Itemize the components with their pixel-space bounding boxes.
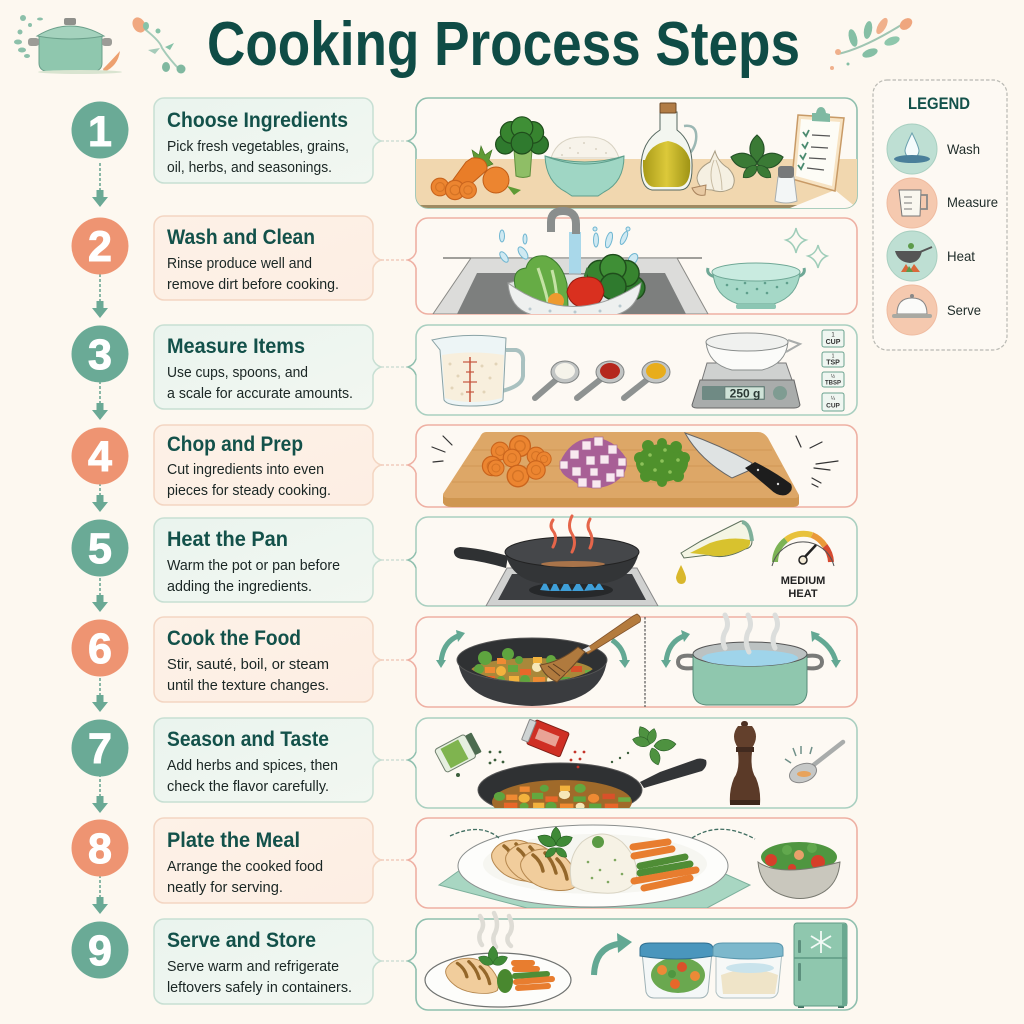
step number 4: 4 <box>88 433 112 481</box>
icon: pepper mill <box>730 721 760 805</box>
legend item: measure: Measure <box>947 194 998 210</box>
card: Season and Taste: Add herbs and spices, then <box>167 758 338 774</box>
step number 3 <box>72 326 128 382</box>
icon: falling spices <box>456 751 629 777</box>
card: Plate the Meal: Arrange the cooked food <box>167 859 323 875</box>
icon: recipe checklist clipboard <box>792 107 844 191</box>
card: Cook the Food: Stir, sauté, boil, or steam <box>167 657 329 673</box>
title: Cooking Process Steps <box>207 10 800 79</box>
icon: carrots and green beans <box>633 842 696 888</box>
card: Chop and Prep: pieces for steady cooking. <box>167 483 331 499</box>
card: Cook the Food: Cook the Food <box>167 627 301 650</box>
icon: measurement tags: TSP <box>826 360 840 366</box>
card: Cook the Food: until the texture changes. <box>167 678 329 694</box>
card: Plate the Meal: neatly for serving. <box>167 880 283 896</box>
step number 8 <box>72 820 128 876</box>
motion lines <box>432 436 838 487</box>
icon: water splashes <box>498 227 640 266</box>
icon: stir arrows left <box>441 636 625 662</box>
step number 7: 7 <box>88 725 112 773</box>
icon: faucet and water stream <box>551 211 581 278</box>
icon: parsley sprig <box>631 724 676 767</box>
step number 9 <box>72 922 128 978</box>
step number 3: 3 <box>88 331 112 379</box>
icon: tasting spoon <box>785 742 843 786</box>
card: Plate the Meal: Plate the Meal <box>167 829 300 852</box>
card: Measure Items <box>154 325 373 409</box>
icon: sliced carrots <box>482 436 551 487</box>
arrow: serve to store <box>594 933 632 975</box>
icon: skillet with seasoned food <box>478 758 706 808</box>
card: Heat the Pan: Warm the pot or pan before <box>167 558 340 574</box>
card: Serve and Store <box>154 919 373 1004</box>
icon: measurement tags: ½ <box>831 373 836 380</box>
card: Choose Ingredients: Pick fresh vegetables, grains, <box>167 139 349 155</box>
connector: step 4 <box>370 457 419 473</box>
panel: serve and store illustration <box>416 913 857 1010</box>
icon: measurement tags: CUP <box>826 402 841 410</box>
icon: boiling pot <box>678 615 822 705</box>
icon: salad bowl <box>758 842 840 898</box>
icon: measuring cup with rice <box>432 335 523 406</box>
connector: step 5 <box>370 552 419 568</box>
icon: decorative sprig right <box>830 16 915 70</box>
connector: step 9 <box>370 953 419 969</box>
icon: rice mound <box>570 834 637 893</box>
legend item: serve <box>887 285 981 335</box>
icon: red spice jar <box>521 717 569 757</box>
icon: stir arrows right <box>666 636 836 662</box>
step number 6 <box>72 620 128 676</box>
icon: measurement tags: 1 <box>832 354 835 360</box>
icon: herb garnish <box>477 946 509 968</box>
connector: step 3 <box>370 359 419 375</box>
connector: step 1 <box>370 133 419 149</box>
card: Chop and Prep: Cut ingredients into even <box>167 462 324 478</box>
card: Plate the Meal <box>154 818 373 903</box>
panel: choose ingredients illustration <box>416 98 857 208</box>
icon: broccoli <box>496 117 548 178</box>
connector: step 7 <box>370 752 419 768</box>
card: Serve and Store: leftovers safely in containers. <box>167 980 352 996</box>
icon: decorative sprig left <box>130 15 186 74</box>
icon: pouring oil bottle <box>676 521 752 584</box>
legend item: heat: Heat <box>947 248 975 264</box>
icon: kitchen scale: 250 g <box>730 386 760 400</box>
icon: cooking pot with leaves <box>14 15 122 74</box>
card: Season and Taste: Season and Taste <box>167 728 329 751</box>
icon: stove burner <box>486 568 658 606</box>
legend item: wash: Wash <box>947 141 980 157</box>
icon: green herb jar <box>434 731 483 773</box>
card: Wash and Clean: remove dirt before cooking. <box>167 277 339 293</box>
legend item: measure <box>887 178 998 228</box>
icon: kitchen scale <box>692 333 800 408</box>
card: Choose Ingredients: Choose Ingredients <box>167 109 348 132</box>
icon: measurement tags: CUP <box>826 339 841 346</box>
step flow arrows <box>92 163 108 914</box>
card: Measure Items: a scale for accurate amounts. <box>167 386 353 402</box>
connector: step 8 <box>370 852 419 868</box>
chart: heat gauge: HEAT <box>788 588 818 600</box>
icon: container with rice <box>713 943 783 998</box>
icon: wooden spatula <box>540 614 641 682</box>
icon: measurement tags: TBSP <box>825 380 841 386</box>
step number 7 <box>72 720 128 776</box>
icon: parsley garnish <box>536 827 574 860</box>
icon: mint colander <box>708 263 804 309</box>
panel: measure items illustration <box>416 325 857 415</box>
icon: measurement tags: 1 <box>831 332 835 338</box>
icon: bowl of washed vegetables <box>508 255 645 316</box>
icon: herb leaves <box>729 135 785 181</box>
icon: diced onion <box>560 437 627 488</box>
chart: heat gauge: MEDIUM <box>781 575 825 587</box>
icon: cutting board <box>443 432 799 507</box>
icon: measurement tags: ¼ <box>831 396 836 402</box>
step number 2: 2 <box>88 223 112 271</box>
icon: refrigerator <box>794 923 847 1008</box>
icon: steam <box>479 913 512 947</box>
card: Chop and Prep: Chop and Prep <box>167 433 303 456</box>
panel: heat the pan illustration <box>416 516 857 606</box>
icon: container with vegetables <box>640 943 713 998</box>
card: Cook the Food <box>154 617 373 702</box>
connector: step 2 <box>370 252 419 268</box>
card: Wash and Clean <box>154 216 373 300</box>
card: Season and Taste <box>154 718 373 802</box>
card: Heat the Pan: Heat the Pan <box>167 528 288 551</box>
chart: heat gauge <box>772 534 834 600</box>
panel: season and taste illustration <box>415 717 858 809</box>
icon: chef's knife <box>685 433 792 495</box>
icon: measurement tags <box>822 330 844 411</box>
icon: grilled chicken <box>492 840 576 890</box>
icon: rising heat waves <box>551 516 592 552</box>
legend item: serve: Serve <box>947 302 981 318</box>
icon: garlic <box>692 151 734 195</box>
icon: bowl of rice <box>545 137 624 196</box>
legend item: heat <box>887 231 975 281</box>
card: Chop and Prep <box>154 425 373 505</box>
icon: frying pan <box>454 537 639 584</box>
icon: salt shaker <box>775 166 797 203</box>
step number 1: 1 <box>88 108 112 156</box>
card: Wash and Clean: Rinse produce well and <box>167 256 312 272</box>
icon: carrots <box>431 146 521 200</box>
card: Choose Ingredients: oil, herbs, and seasonings. <box>167 160 332 176</box>
step number 1 <box>72 102 128 158</box>
icon: skillet with stir fry <box>457 638 607 706</box>
legend panel <box>873 80 1007 350</box>
step number 4 <box>72 428 128 484</box>
step number 8: 8 <box>88 825 112 873</box>
icon: placemat and plate <box>439 825 750 908</box>
step number 2 <box>72 218 128 274</box>
step number 9: 9 <box>88 927 112 975</box>
icon: carrots and beans <box>514 963 552 988</box>
legend item: wash <box>887 124 980 174</box>
legend heading: LEGEND <box>908 94 970 113</box>
step number 6: 6 <box>88 625 112 673</box>
card: Heat the Pan: adding the ingredients. <box>167 579 312 595</box>
card: Measure Items: Measure Items <box>167 335 305 358</box>
panel: plate the meal illustration <box>416 818 857 908</box>
icon: kitchen sink <box>433 258 708 314</box>
connector: step 6 <box>370 652 419 668</box>
card: Serve and Store: Serve and Store <box>167 929 316 952</box>
icon: served plate <box>425 953 571 1007</box>
card: Choose Ingredients <box>154 98 373 183</box>
card: Season and Taste: check the flavor carefully. <box>167 779 329 795</box>
panel: chop and prep illustration <box>416 425 857 507</box>
icon: sparkles <box>786 228 827 268</box>
card: Wash and Clean: Wash and Clean <box>167 226 315 249</box>
icon: chopped herbs <box>634 438 690 487</box>
card: Heat the Pan <box>154 518 373 602</box>
card: Serve and Store: Serve warm and refrigerate <box>167 959 339 975</box>
panel: wash and clean illustration <box>416 211 857 316</box>
icon: measuring spoons <box>535 361 670 398</box>
step number 5 <box>72 520 128 576</box>
panel: cook the food illustration <box>416 614 857 707</box>
icon: olive oil bottle <box>641 103 696 190</box>
dashed placement arrows <box>450 829 755 839</box>
step number 5: 5 <box>88 525 112 573</box>
card: Measure Items: Use cups, spoons, and <box>167 365 308 381</box>
